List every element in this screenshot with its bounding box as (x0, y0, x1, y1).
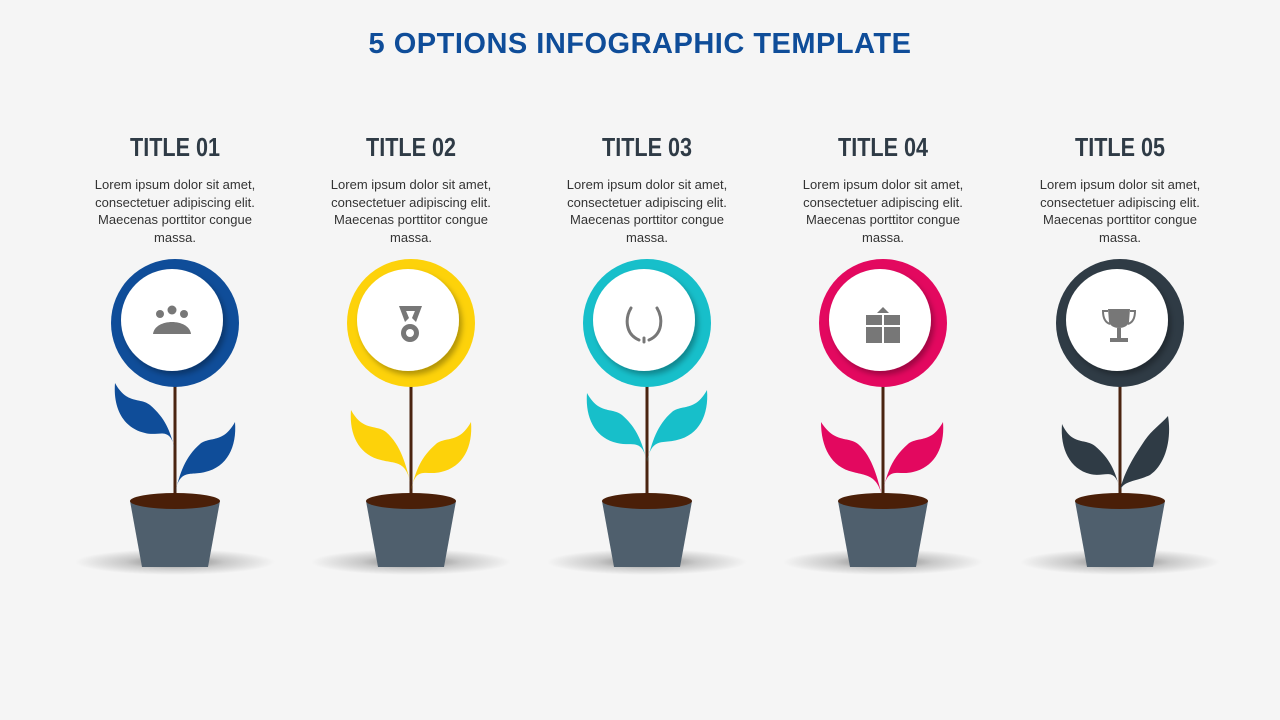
text block: title 05: consectetuer adipiscing elit. (1040, 194, 1200, 210)
text block: title 04: massa. (862, 230, 904, 244)
text block: title 05: Maecenas porttitor congue (1043, 212, 1197, 227)
text block: title 05 (1040, 132, 1200, 244)
icon: trophy (1103, 309, 1135, 342)
text block: title 01: TITLE 01 (130, 132, 220, 162)
plant 1 (75, 259, 275, 575)
text block: title 04: consectetuer adipiscing elit. (803, 194, 963, 210)
text block: title 03: massa. (626, 230, 668, 244)
icon: team (153, 306, 191, 334)
plant 2 (311, 259, 511, 575)
text block: title 05: TITLE 05 (1075, 132, 1165, 162)
text block: title 01: Lorem ipsum dolor sit amet, (95, 177, 255, 192)
text block: title 03: TITLE 03 (602, 132, 692, 162)
plant 4 (783, 259, 983, 575)
text block: title 02: TITLE 02 (366, 132, 456, 162)
plant 3 (547, 259, 747, 575)
text block: title 04: Lorem ipsum dolor sit amet, (803, 177, 963, 192)
plant 5 (1020, 259, 1220, 575)
text block: title 04: Maecenas porttitor congue (806, 212, 960, 227)
icon: gift (866, 307, 900, 343)
text block: title 02: Lorem ipsum dolor sit amet, (331, 177, 491, 192)
text block: title 03: Lorem ipsum dolor sit amet, (567, 177, 727, 192)
text block: title 01: Maecenas porttitor congue (98, 212, 252, 227)
title: 5 OPTIONS INFOGRAPHIC TEMPLATE (369, 28, 911, 60)
text block: title 04 (803, 132, 963, 244)
text block: title 04: TITLE 04 (838, 132, 928, 162)
text block: title 03 (567, 132, 727, 244)
text block: title 05: massa. (1099, 230, 1141, 244)
text block: title 02 (331, 132, 491, 244)
text block: title 01: consectetuer adipiscing elit. (95, 194, 255, 210)
text block: title 02: massa. (390, 230, 432, 244)
icon: medal (399, 306, 422, 342)
text block: title 03: consectetuer adipiscing elit. (567, 194, 727, 210)
text block: title 01: massa. (154, 230, 196, 244)
text block: title 03: Maecenas porttitor congue (570, 212, 724, 227)
icon: laurel (627, 308, 661, 342)
text block: title 05: Lorem ipsum dolor sit amet, (1040, 177, 1200, 192)
text block: title 02: consectetuer adipiscing elit. (331, 194, 491, 210)
text block: title 01 (95, 132, 255, 244)
text block: title 02: Maecenas porttitor congue (334, 212, 488, 227)
